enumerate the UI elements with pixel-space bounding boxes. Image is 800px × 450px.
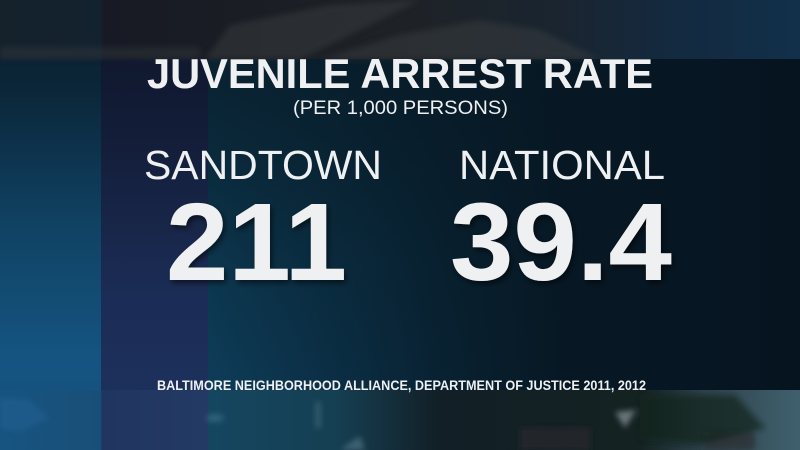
subtitle: (PER 1,000 PERSONS) [293,98,508,119]
label: National: NATIONAL [459,142,665,188]
value: 39.4: 39.4 [450,181,672,304]
bottom photo band: neighborhood aerial [0,390,800,450]
column: Sandtown [144,142,382,304]
top photo band: city aerial [0,0,800,59]
title: JUVENILE ARREST RATE [147,50,653,97]
value: 211: 211 [166,181,347,304]
source note: BALTIMORE NEIGHBORHOOD ALLIANCE, DEPARTMENT OF JUSTICE 2011, 2012 [157,378,646,393]
label: Sandtown: SANDTOWN [144,142,382,188]
column: National [450,142,672,304]
